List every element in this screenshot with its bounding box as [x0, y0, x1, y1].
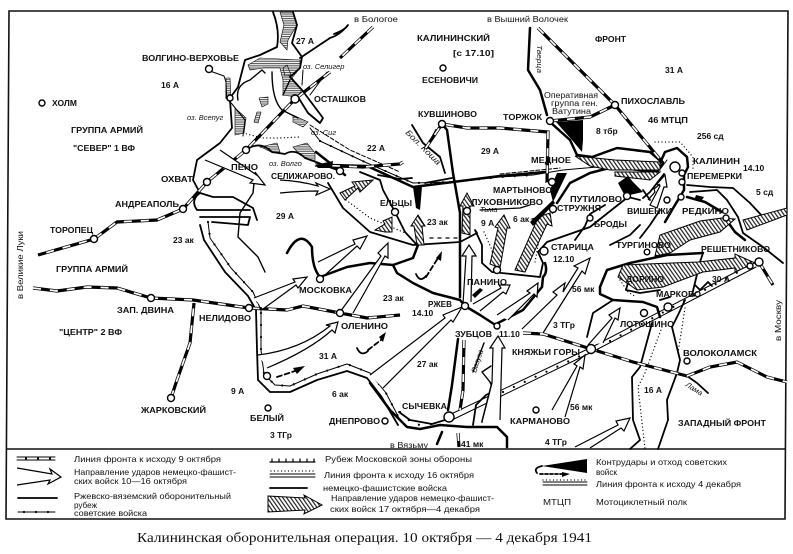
- map labels: cities, armies, rivers: СЕЛИЖАРОВО.: [271, 171, 335, 181]
- arrow: Olenino to north: [340, 243, 388, 313]
- map labels: cities, armies, rivers: 14.10: [743, 163, 765, 173]
- legend symbol: front line 16 October: [270, 471, 315, 477]
- legend symbol: counterblow arrow: [536, 459, 587, 477]
- map labels: cities, armies, rivers: РЕДКИНО: [682, 206, 729, 216]
- legend text: hatched attack direction: Направление ударов немецко-фашист-: [331, 494, 494, 503]
- arrow: to Peno: [205, 150, 265, 185]
- map labels: cities, armies, rivers: 11.10: [499, 329, 520, 339]
- legend text: counterblows: [596, 458, 727, 477]
- legend text: front line 16 October: [323, 471, 474, 493]
- legend symbol: front line 9 October: [17, 457, 55, 460]
- map labels: cities, armies, rivers: ГРУППА АРМИЙ: [71, 124, 143, 135]
- rivers and lake shores: [193, 12, 708, 395]
- arrow: Rzhev to east: [473, 285, 510, 311]
- legend text: Rzhev-Vyazma defensive line: [74, 492, 231, 518]
- map labels: cities, armies, rivers: 6 ак: [332, 389, 349, 399]
- arrow: 4 panzer group: [575, 418, 630, 448]
- southern front lines: Sychevka: [370, 339, 507, 447]
- dashed retreat arrows: [277, 251, 442, 377]
- map labels: cities, armies, rivers: ХОЛМ: [52, 98, 77, 108]
- city markers: [39, 65, 763, 424]
- map labels: cities, armies, rivers: НЕЛИДОВО: [199, 313, 251, 323]
- map labels: cities, armies, rivers: 56 мк: [570, 402, 593, 412]
- thick front lines, centre: [287, 125, 628, 326]
- legend text: attack direction: Направление ударов немецко-фашист-: [74, 468, 236, 477]
- map labels: cities, armies, rivers: ВИШЕНКИ: [627, 206, 672, 216]
- legend symbol: Soviet troops dotted line: [18, 511, 55, 513]
- map labels: cities, armies, rivers: 9 А: [481, 218, 494, 228]
- legend text: attack direction: [74, 468, 236, 486]
- map labels: cities, armies, rivers: 9 А: [231, 386, 244, 396]
- map labels: cities, armies, rivers: [с 17.10]: [453, 48, 494, 58]
- legend symbol: hatched attack arrow: [268, 495, 322, 514]
- map labels: cities, armies, rivers: ОХВАТ: [161, 174, 194, 184]
- map labels: cities, armies, rivers: оз. Сиг: [311, 128, 336, 137]
- map labels: cities, armies, rivers: РЕШЕТНИКОВО: [701, 244, 770, 254]
- legend abbreviation: motorcycle regiment: МТЦП: [543, 498, 571, 507]
- map labels: cities, armies, rivers: 31 А: [319, 351, 337, 361]
- map labels: cities, armies, rivers: ПЕРЕМЕРКИ: [687, 171, 742, 181]
- hatched attack arrows 17 October - 4 December: [340, 156, 787, 290]
- map labels: cities, armies, rivers: Тьма: [480, 205, 498, 214]
- map labels: cities, armies, rivers: МАРКОВО: [656, 289, 701, 299]
- map labels: cities, armies, rivers: МОСКОВКА: [299, 285, 352, 295]
- map labels: cities, armies, rivers: в Бологое: [354, 15, 399, 24]
- map labels: cities, armies, rivers: МЕДНОЕ: [531, 155, 571, 165]
- map labels: cities, armies, rivers: 23 ак: [427, 217, 449, 227]
- front line 9 October, western arc: [194, 193, 400, 425]
- map labels: cities, armies, rivers: ЛОТОШИНО: [620, 319, 674, 329]
- arrow: 56 motorised corps to north: [522, 258, 590, 333]
- map labels: cities, armies, rivers: ОЛЕНИНО: [341, 321, 388, 331]
- lakes: [226, 12, 315, 162]
- map labels: cities, armies, rivers: Оперативная: [544, 91, 598, 100]
- map labels: cities, armies, rivers: Бол. Коша: [404, 128, 443, 167]
- map labels: cities, armies, rivers: ПУТИЛОВО: [570, 194, 622, 204]
- map labels: cities, armies, rivers: 12.10: [553, 254, 575, 264]
- legend symbol: front line 4 December: [543, 480, 587, 485]
- map labels: cities, armies, rivers: 22 А: [367, 143, 385, 153]
- map labels: cities, armies, rivers: 56 мк: [572, 284, 595, 294]
- front lines, Kalinin sector: [550, 122, 783, 449]
- arrow: 56 motorised corps to Knyazhi Gory: [552, 355, 585, 417]
- map labels: cities, armies, rivers: СТАРИЦА: [551, 242, 594, 252]
- map labels: cities, armies, rivers: ТОРЖОК: [503, 112, 543, 122]
- map labels: cities, armies, rivers: оз. Волго: [269, 159, 302, 168]
- arrow: towards Kalinin: [650, 175, 667, 208]
- map labels: cities, armies, rivers: ЕЛЬЦЫ: [380, 198, 412, 208]
- front line double: Sychevka to Reshetnikovo: [449, 263, 756, 420]
- map labels: cities, armies, rivers: ПЕНО: [231, 162, 258, 172]
- map labels: cities, armies, rivers: ФРОНТ: [595, 34, 627, 44]
- map labels: cities, armies, rivers: 27 А: [296, 36, 314, 46]
- map labels: cities, armies, rivers: 30 А: [712, 274, 730, 284]
- legend text: hatched attack direction: [330, 494, 494, 514]
- map labels: cities, armies, rivers: 3 ТГр: [270, 430, 292, 440]
- map labels: cities, armies, rivers: ПИХОСЛАВЛЬ: [621, 96, 685, 106]
- map labels: cities, armies, rivers: Вазуза: [469, 348, 485, 374]
- map labels: cities, armies, rivers: оз. Селигер: [303, 62, 344, 71]
- map labels: cities, armies, rivers: ЖАРКОВСКИЙ: [140, 404, 206, 415]
- map labels: cities, armies, rivers: ВОЛОКОЛАМСК: [683, 348, 758, 358]
- arrow: Nelidovo to north east: [254, 277, 307, 309]
- map labels: cities, armies, rivers: 4 ТГр: [545, 437, 567, 447]
- legend symbol: attack direction arrow: [17, 468, 61, 485]
- arrow: 30 army small: [648, 184, 660, 200]
- map labels: cities, armies, rivers: 16 А: [644, 385, 662, 395]
- legend text: counterblows: войск: [596, 468, 617, 477]
- arrow: Knyazhi Gory to Lotoshino: [588, 308, 620, 345]
- legend text: motorcycle regiment: Мотоциклетный полк: [596, 498, 687, 507]
- legend symbol: Moscow zone line: [270, 459, 315, 462]
- map labels: cities, armies, rivers: ЛУКОВНИКОВО: [471, 197, 543, 207]
- map labels: cities, armies, rivers: КНЯЖЬИ ГОРЫ: [512, 347, 580, 357]
- map labels: cities, armies, rivers: "ЦЕНТР" 2 ВФ: [59, 327, 122, 337]
- map labels: cities, armies, rivers: ТУРГИНОВО: [616, 240, 671, 250]
- legend text: counterblows: Контрудары и отход советских: [596, 458, 727, 467]
- caption: Калининская оборонительная операция. 10 октября — 4 декабря 1941: [137, 530, 592, 545]
- map labels: cities, armies, rivers: КАЛИНИН: [693, 156, 740, 166]
- map labels: cities, armies, rivers: в Вязьму: [390, 441, 428, 450]
- map labels: cities, armies, rivers: ГРУППА АРМИЙ: [56, 263, 128, 274]
- legend text: Moscow zone: Рубеж Московской зоны обороны: [325, 455, 472, 464]
- map labels: cities, armies, rivers: 6 ак: [513, 214, 530, 224]
- legend text: hatched attack direction: ских войск 17 октября—4 декабря: [330, 505, 480, 514]
- map labels: cities, armies, rivers: РЖЕВ: [428, 299, 452, 309]
- map labels: cities, armies, rivers: ДНЕПРОВО: [329, 416, 380, 426]
- map labels: cities, armies, rivers: [16, 15, 783, 450]
- map labels: cities, armies, rivers: "СЕВЕР" 1 ВФ: [73, 143, 135, 153]
- map labels: cities, armies, rivers: ЗАПАДНЫЙ ФРОНТ: [678, 417, 767, 428]
- arrow: Zubtsov to Staritsa: [497, 283, 538, 320]
- map labels: cities, armies, rivers: КАЛИНИНСКИЙ: [417, 32, 490, 43]
- front lines along north: Ostashkov to Kalinin: [243, 125, 620, 187]
- map labels: cities, armies, rivers: ВОЛГИНО-ВЕРХОВЬЕ: [142, 53, 239, 63]
- legend text: front line 16 October: немецко-фашистские войска: [323, 484, 447, 493]
- legend symbol: German troops line: [270, 487, 307, 489]
- white attack arrows 10-16 October: [205, 150, 667, 448]
- arrow: Sychevka to Zubtsov: [482, 336, 505, 422]
- map labels: cities, armies, rivers: БЕЛЫЙ: [250, 412, 284, 423]
- map labels: cities, armies, rivers: 31 А: [665, 65, 683, 75]
- map labels: cities, armies, rivers: ДОРИНО: [626, 274, 664, 284]
- legend text: front line 16 October: Линия фронта к исходу 16 октября: [324, 471, 474, 480]
- map labels: cities, armies, rivers: ЗАП. ДВИНА: [117, 305, 174, 315]
- railways: [33, 27, 787, 447]
- legend text: attack direction: ских войск 10—16 октября: [74, 477, 187, 486]
- legend text: Rzhev-Vyazma defensive line: Ржевско-вяземский оборонительный: [74, 492, 231, 501]
- legend text: Rzhev-Vyazma defensive line: советские войска: [74, 509, 147, 518]
- map labels: cities, armies, rivers: ОСТАШКОВ: [314, 94, 366, 104]
- map labels: cities, armies, rivers: 29 А: [276, 211, 294, 221]
- map labels: cities, armies, rivers: 46 МТЦП: [648, 115, 688, 125]
- map labels: cities, armies, rivers: ПАНИНО: [467, 277, 507, 287]
- map labels: cities, armies, rivers: КАРМАНОВО: [510, 416, 570, 426]
- map labels: cities, armies, rivers: 5 сд: [756, 187, 774, 197]
- map labels: cities, armies, rivers: МАРТЫНОВО: [493, 185, 552, 195]
- map labels: cities, armies, rivers: в Великие Луки: [16, 231, 25, 299]
- map labels: cities, armies, rivers: группа ген.: [551, 99, 598, 108]
- map labels: cities, armies, rivers: в Москву: [774, 300, 783, 341]
- legend text: front line 9 October: Линия фронта к исходу 9 октября: [74, 455, 221, 464]
- map labels: cities, armies, rivers: СТРУЖНЯ: [557, 203, 601, 213]
- legend text: Rzhev-Vyazma defensive line: рубеж: [74, 501, 98, 510]
- map labels: cities, armies, rivers: БРОДЫ: [594, 219, 627, 229]
- map labels: cities, armies, rivers: 23 ак: [173, 235, 195, 245]
- map labels: cities, armies, rivers: 23 ак: [383, 293, 405, 303]
- map labels: cities, armies, rivers: Ватутина: [552, 107, 592, 116]
- black Soviet counterblow arrows: [315, 120, 704, 298]
- map labels: cities, armies, rivers: 16 А: [161, 80, 179, 90]
- map labels: cities, armies, rivers: 3 ТГр: [553, 320, 575, 330]
- arrow: to Olenino: [258, 322, 338, 368]
- arrow: to Selizharovo: [280, 180, 330, 195]
- legend: [17, 455, 741, 518]
- legend text: front line 4 December: Линия фронта к исходу 4 декабря: [596, 480, 741, 489]
- map labels: cities, armies, rivers: 8 тбр: [596, 126, 618, 136]
- map labels: cities, armies, rivers: 27 ак: [417, 359, 439, 369]
- map labels: cities, armies, rivers: 29 А: [481, 146, 499, 156]
- map labels: cities, armies, rivers: 41 мк: [461, 439, 484, 449]
- arrow: to Yeltsy: [318, 236, 367, 275]
- map labels: cities, armies, rivers: ЗУБЦОВ: [455, 329, 492, 339]
- map labels: cities, armies, rivers: 14.10: [412, 308, 434, 318]
- map labels: cities, armies, rivers: в Вышний Волочек: [487, 15, 569, 24]
- legend symbol: Rzhev-Vyazma line: [18, 497, 57, 499]
- map labels: cities, armies, rivers: КУВШИНОВО: [418, 109, 477, 119]
- map labels: cities, armies, rivers: АНДРЕАПОЛЬ: [115, 199, 179, 209]
- map labels: cities, armies, rivers: ЕСЕНОВИЧИ: [422, 75, 478, 85]
- map labels: cities, armies, rivers: Тверца: [535, 45, 544, 73]
- map labels: cities, armies, rivers: 256 сд: [697, 131, 724, 141]
- map labels: cities, armies, rivers: Лама: [683, 380, 705, 398]
- arrow: 27 corps to Rzhev: [370, 307, 462, 388]
- map labels: cities, armies, rivers: СЫЧЕВКА: [402, 401, 447, 411]
- arrow: Rzhev to Panino: [462, 245, 476, 304]
- map labels: cities, armies, rivers: ТОРОПЕЦ: [50, 225, 94, 235]
- map labels: cities, armies, rivers: оз. Всепуг: [187, 113, 224, 122]
